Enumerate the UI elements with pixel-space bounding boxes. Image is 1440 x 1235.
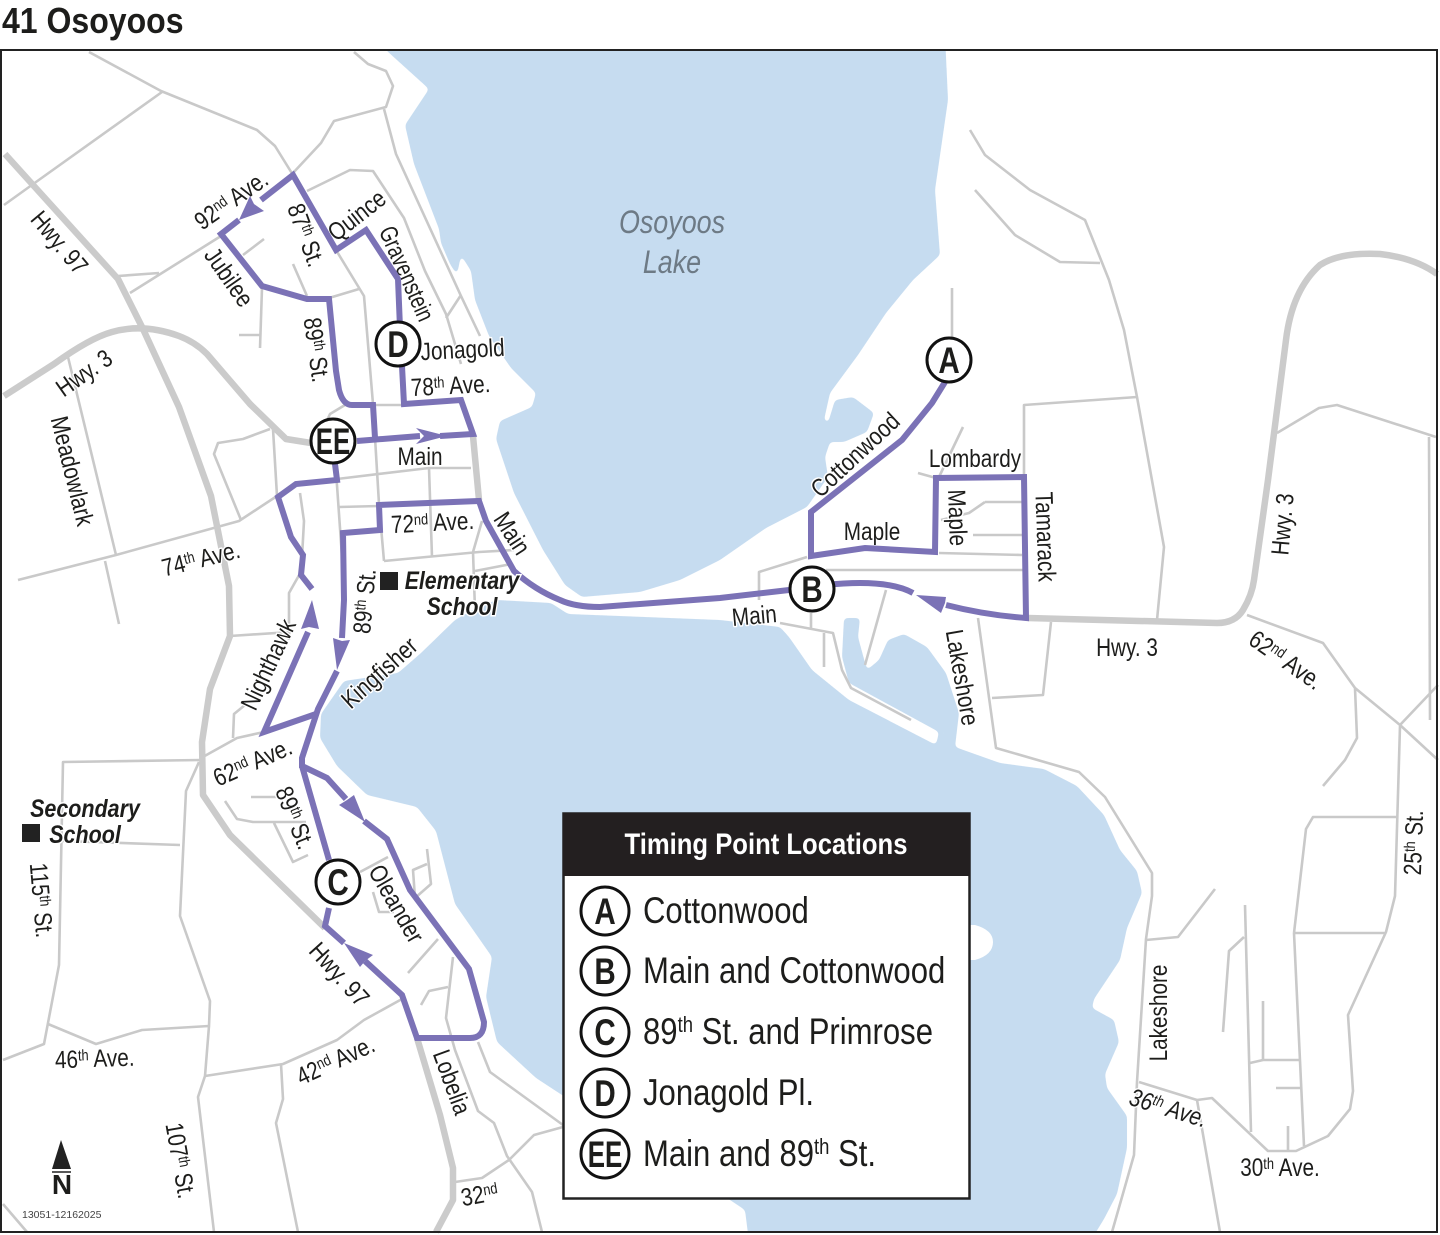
street labels: Nighthawk [235, 614, 302, 714]
legend: timing point locations [563, 813, 970, 1198]
lakes [320, 35, 1142, 1235]
legend entries: Main and 89 [643, 1134, 814, 1175]
street labels: 32 [459, 1180, 486, 1212]
street labels: Cottonwood [805, 407, 905, 503]
street labels: th [174, 1155, 193, 1169]
street labels: Jubilee [199, 242, 260, 312]
street labels: Ave. [243, 732, 296, 777]
street labels: 89 [270, 782, 305, 814]
street labels: Lobelia [427, 1046, 477, 1118]
street labels: St. [303, 349, 335, 384]
legend entries: EE [588, 1133, 622, 1175]
street labels: th [352, 599, 370, 611]
timing point markers: D [387, 325, 409, 366]
street labels: th [182, 549, 197, 568]
street labels: 25 [1398, 852, 1427, 876]
street labels: Ave. [326, 1030, 379, 1075]
street labels: Gravenstein [373, 222, 440, 325]
legend entries: St. and Primrose [693, 1012, 933, 1053]
street labels: th [1263, 1156, 1274, 1173]
street labels: 74 [159, 549, 188, 582]
legend entries: St. [829, 1134, 876, 1175]
title: 41 Osoyoos [2, 1, 184, 41]
street labels: Ave. [428, 506, 475, 537]
street labels: Hwy. 97 [304, 937, 375, 1012]
secondary school label: Secondary [30, 794, 141, 822]
street labels: Hwy. 97 [25, 205, 94, 280]
timing point markers: EE [316, 420, 350, 462]
street labels: Meadowlark [45, 413, 100, 529]
legend entries: th [678, 1014, 693, 1037]
street labels: 115 [24, 862, 55, 897]
legend entries [581, 887, 945, 1178]
street labels: nd [482, 1180, 499, 1200]
street labels: Lakeshore [940, 627, 985, 728]
street labels: nd [413, 511, 429, 529]
street labels: Lombardy [929, 444, 1022, 472]
secondary school label: School [49, 820, 121, 848]
island in lower lake [960, 925, 993, 960]
lake label: Lake [643, 245, 701, 281]
street labels: St. [168, 1165, 201, 1201]
street labels: Main [398, 442, 442, 470]
street labels: 62 [1244, 624, 1279, 661]
street labels: 30 [1240, 1153, 1263, 1181]
street labels: nd [1267, 640, 1289, 662]
street labels: St. [350, 568, 381, 601]
street labels: th [297, 222, 317, 238]
street labels: 87 [282, 200, 316, 231]
street labels: St. [293, 231, 331, 270]
legend entries: D [594, 1074, 616, 1115]
street labels: 72 [390, 509, 415, 539]
legend entries: C [594, 1013, 616, 1054]
street labels: nd [231, 753, 251, 775]
street labels: th [286, 805, 306, 821]
timing point markers: B [801, 570, 823, 611]
lower lake [320, 600, 1142, 1235]
legend header [563, 813, 970, 876]
legend entries: A [594, 892, 616, 933]
street labels: 78 [410, 372, 435, 402]
elementary school label: School [427, 592, 498, 620]
street labels: 107 [160, 1120, 194, 1159]
timing point markers: A [938, 341, 960, 382]
upper lake [375, 35, 948, 597]
street labels: nd [209, 193, 231, 215]
street labels: Ave. [1274, 646, 1328, 695]
north arrow [52, 1140, 72, 1200]
street labels: th [433, 374, 445, 392]
street labels: Hwy. 3 [51, 344, 117, 402]
street labels: Ave. [88, 1043, 135, 1073]
street labels: Main [488, 507, 536, 560]
street labels: Ave. [1159, 1092, 1211, 1133]
route direction arrows [239, 196, 946, 967]
legend entries: Cottonwood [643, 891, 809, 932]
street labels: 89 [347, 609, 378, 635]
elementary school label [380, 566, 520, 620]
legend entries: Main and Cottonwood [643, 951, 945, 992]
north arrow: N [52, 1169, 72, 1200]
street labels: Ave. [444, 369, 491, 400]
legend heading: Timing Point Locations [625, 827, 907, 860]
street labels: Jonagold [420, 333, 505, 366]
lake label [619, 205, 725, 281]
street labels: th [35, 895, 54, 907]
street labels: Tamarack [1030, 491, 1061, 583]
street labels: Maple [943, 489, 973, 546]
street labels: Ave. [1274, 1153, 1320, 1181]
bus route [221, 175, 1026, 1038]
street labels: Main [731, 599, 778, 631]
legend entries: Jonagold Pl. [643, 1073, 814, 1114]
timing point markers: C [327, 863, 349, 904]
street labels: Maple [844, 517, 900, 545]
street labels: nd [314, 1052, 334, 1073]
street labels: th [309, 339, 328, 352]
street labels: 46 [54, 1045, 78, 1074]
street labels: 89 [298, 316, 329, 342]
street labels: Ave. [192, 535, 243, 574]
street labels: St. [282, 814, 320, 853]
street labels: 42 [292, 1055, 325, 1091]
legend entries: B [594, 952, 616, 993]
timing point markers [311, 322, 971, 904]
street labels: Kingfisher [335, 631, 423, 714]
street labels: St. [1399, 810, 1429, 842]
street labels: 92 [189, 199, 224, 235]
street labels: Ave. [219, 164, 273, 214]
street labels: Hwy. 3 [1096, 633, 1158, 661]
street labels: St. [28, 905, 59, 939]
elementary school label: Elementary [405, 566, 520, 594]
street labels: th [1402, 841, 1419, 852]
secondary school label [22, 794, 141, 848]
street labels: 62 [209, 757, 241, 792]
lake label: Osoyoos [619, 205, 725, 241]
legend entries: 89 [643, 1012, 678, 1053]
street labels: Lakeshore [1144, 965, 1172, 1061]
map code: 13051-12162025 [22, 1209, 102, 1221]
street labels: Quince [322, 184, 391, 247]
street labels: Hwy. 3 [1266, 492, 1299, 556]
legend entries: th [814, 1136, 829, 1159]
street labels: th [1151, 1092, 1166, 1112]
street labels: 36 [1126, 1082, 1157, 1116]
street labels: Oleander [363, 860, 430, 948]
street labels: th [78, 1047, 89, 1065]
